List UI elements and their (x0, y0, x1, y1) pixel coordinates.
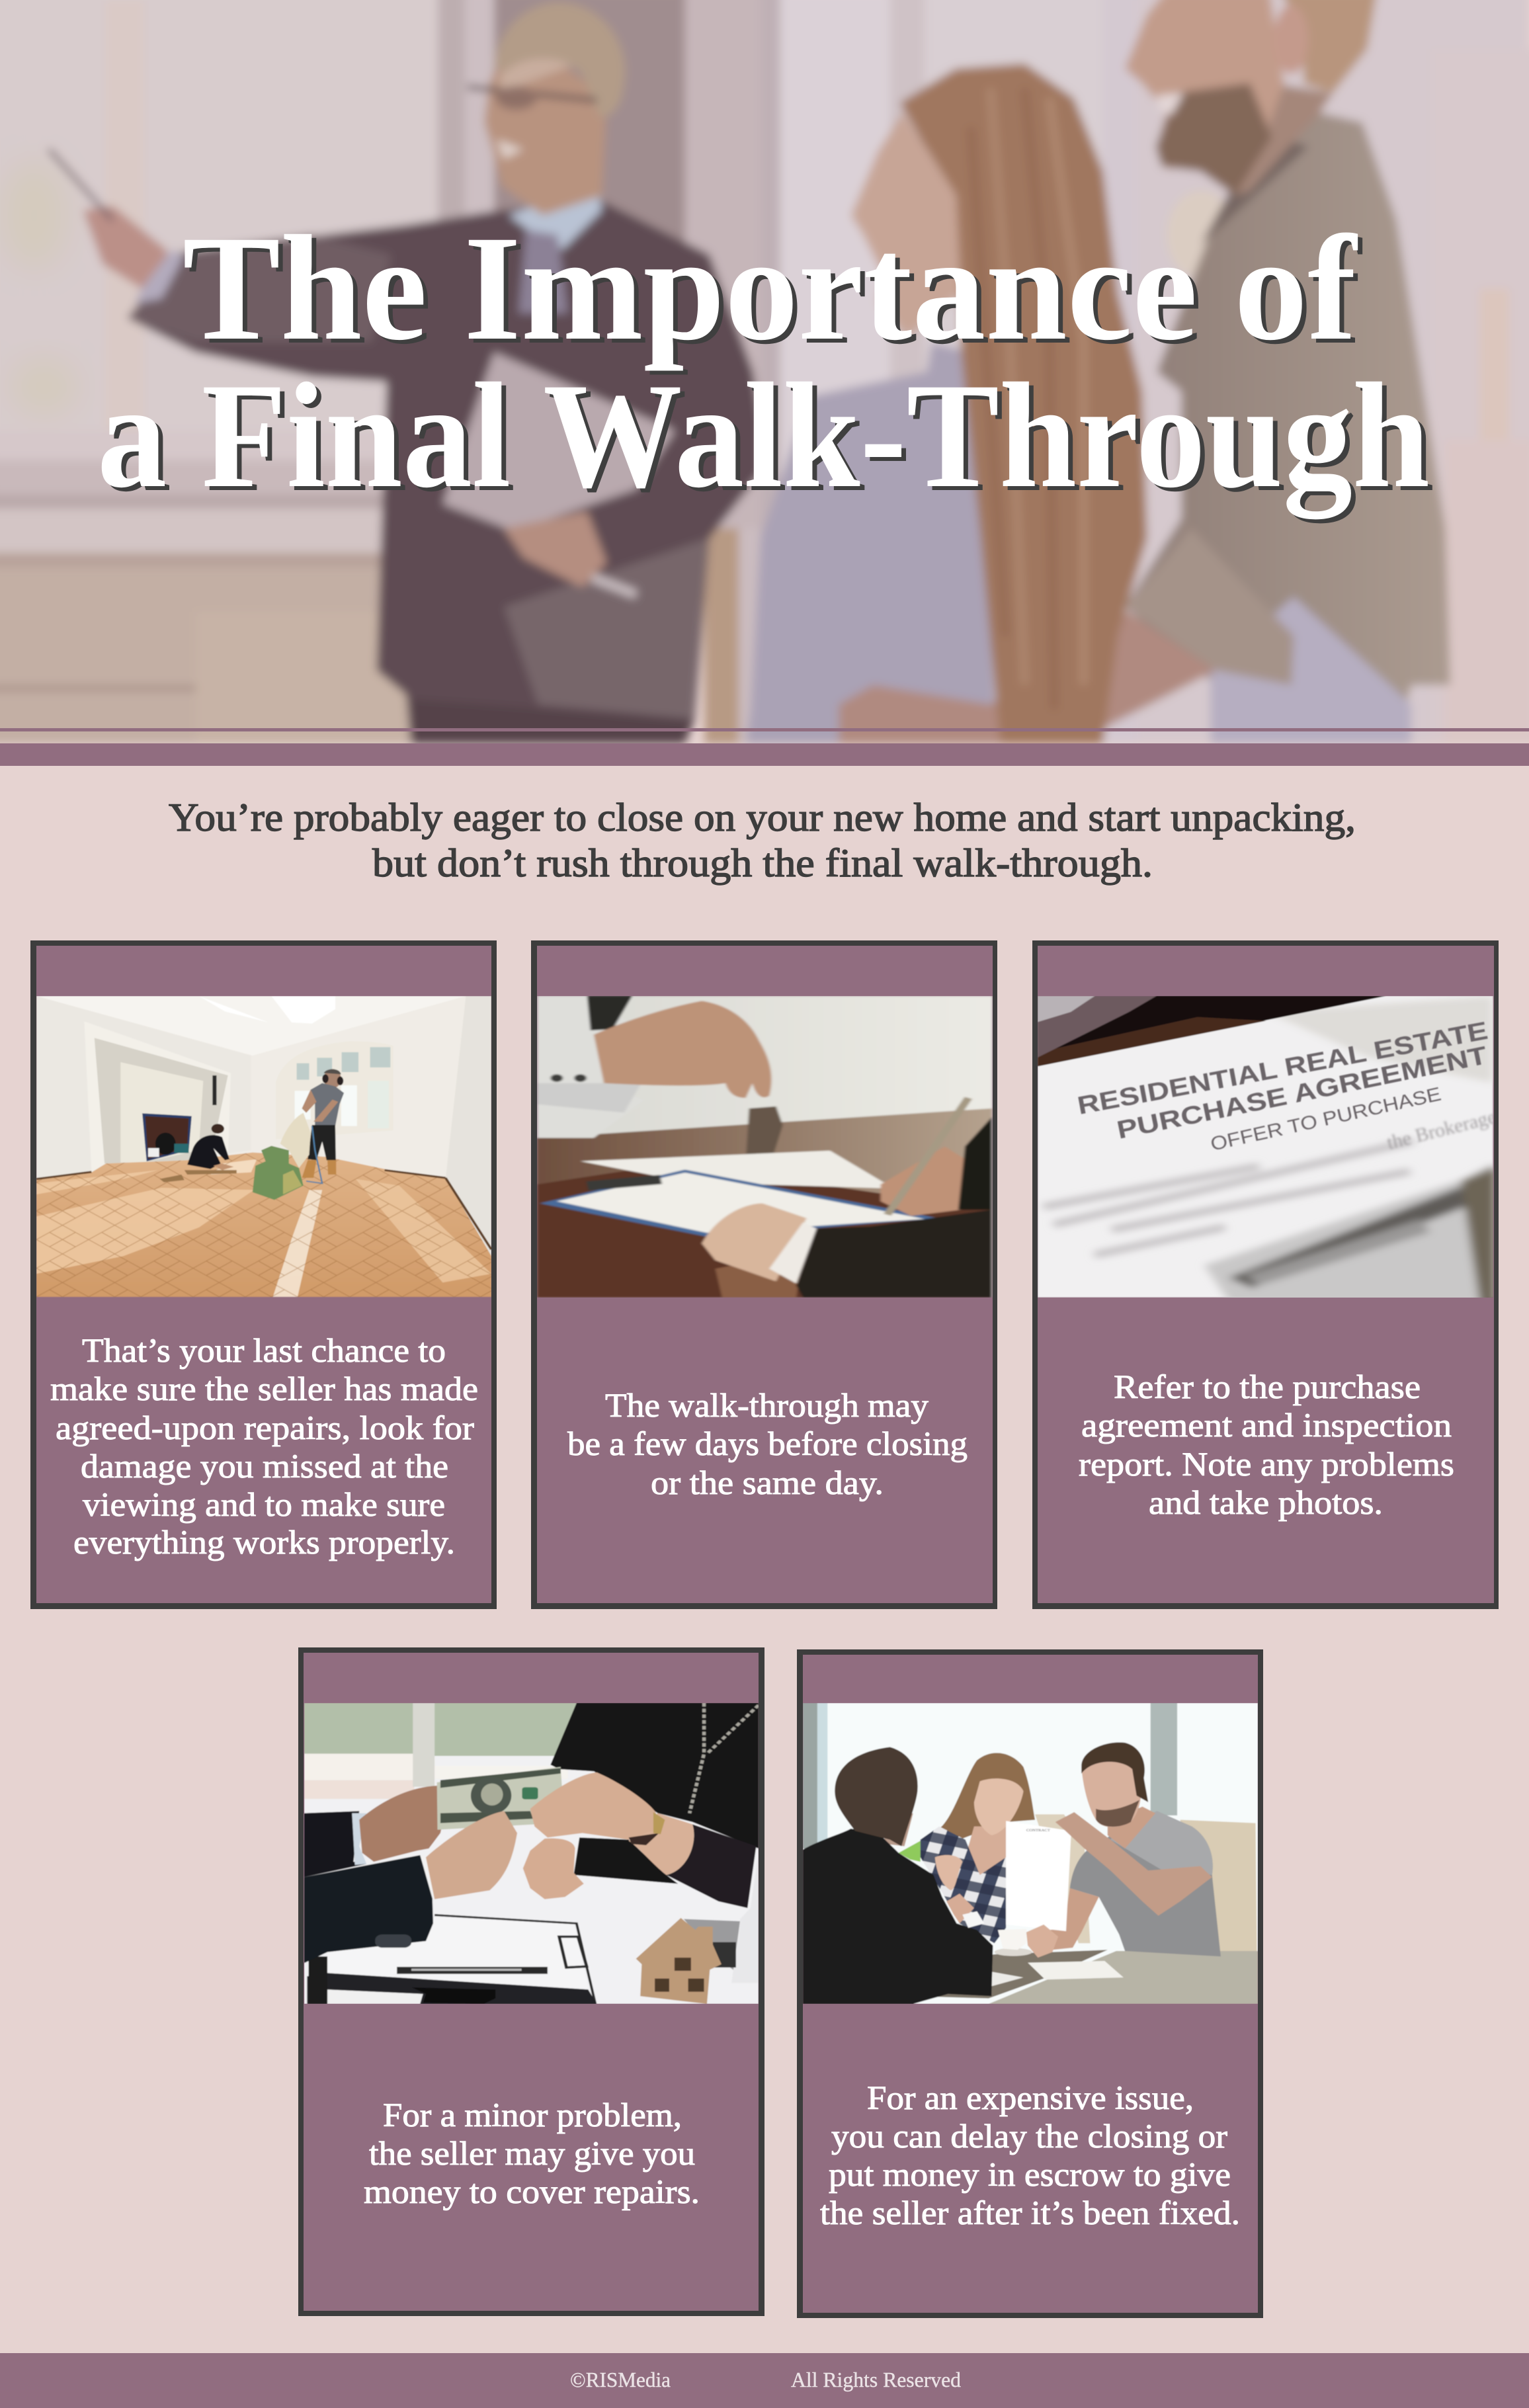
photo: couple reviewing contract with agent: CONTRACT (1026, 1829, 1050, 1833)
footer bar (0, 2353, 1529, 2408)
agent suit (127, 200, 767, 743)
arm and hand behind hair (839, 612, 1216, 743)
intro text (169, 796, 1356, 885)
document lettering in photo (1075, 1017, 1499, 1155)
man head (1235, 83, 1333, 196)
woman (939, 1753, 1035, 1840)
photo: couple reviewing contract with agent (803, 1703, 1258, 2004)
table (989, 1951, 1258, 2004)
intro text: You’re probably eager to close on your new home and start unpacking, (169, 796, 1356, 839)
card 1 text: make sure the seller has made (50, 1371, 478, 1408)
card 4 text: For a minor problem, (383, 2097, 682, 2134)
card 4 text: money to cover repairs. (364, 2174, 700, 2211)
title: The Importance of (183, 205, 1358, 372)
man with sander (323, 1069, 341, 1089)
document lettering in photo: PURCHASE AGREEMENT (1114, 1042, 1489, 1145)
panel: card 1 (30, 940, 497, 1609)
card 3 text: Refer to the purchase (1114, 1369, 1421, 1406)
document lettering in photo: RESIDENTIAL REAL ESTATE (1075, 1017, 1490, 1120)
card 4 text: the seller may give you (369, 2136, 695, 2173)
agent head (484, 46, 606, 216)
rights text: All Rights Reserved (791, 2368, 961, 2391)
man shirt (1125, 112, 1450, 743)
green chair (899, 1841, 921, 1862)
left half of photo: agent (0, 0, 778, 743)
tablet and lower hand (443, 353, 675, 531)
card 2 text (567, 1388, 968, 1502)
laptop (684, 1919, 740, 1972)
card 1 text: everything works properly. (73, 1524, 455, 1561)
photo: purchase agreement document (1038, 996, 1499, 1306)
panel: card 4 (298, 1647, 764, 2316)
card 5 text: put money in escrow to give (829, 2157, 1231, 2194)
agent hand, shirt, tie (83, 206, 169, 288)
woman in black (550, 1703, 759, 1848)
card 4 text (364, 2097, 700, 2211)
cup (995, 1948, 1032, 1956)
arm holding page (1055, 1812, 1212, 1916)
kneeling worker (212, 1124, 224, 1134)
banknotes (437, 1767, 563, 1830)
panel: card 3 (1032, 940, 1499, 1609)
man in grey tee (1070, 1811, 1221, 1956)
wooden house (636, 1918, 722, 2004)
card 3 text: agreement and inspection (1081, 1407, 1452, 1444)
card 5 text: you can delay the closing or (831, 2118, 1227, 2155)
agent from behind (946, 1893, 974, 1923)
hair (900, 63, 1147, 743)
panel: card 2 (531, 940, 997, 1609)
right half of photo: couple (746, 0, 1529, 743)
card 1 text: viewing and to make sure (83, 1487, 445, 1524)
document lettering in photo: OFFER TO PURCHASE (1209, 1084, 1443, 1155)
copyright text: ©RISMedia (570, 2368, 671, 2391)
card 3 text: and take photos. (1149, 1485, 1383, 1522)
card 1 text (50, 1333, 478, 1561)
chairs (1035, 1814, 1090, 1943)
title (97, 205, 1430, 520)
photo: floor refinishing (36, 996, 491, 1297)
title: a Final Walk-Through (97, 353, 1430, 520)
thin rule over hero (0, 728, 1529, 731)
card 2 text: be a few days before closing (567, 1426, 968, 1463)
woman face (851, 112, 961, 337)
hero bottom band (0, 743, 1529, 766)
intro text: but don’t rush through the final walk-through. (372, 841, 1153, 885)
clipboard (327, 1917, 588, 1989)
card 5 text: For an expensive issue, (867, 2080, 1194, 2117)
card 1 text: That’s your last chance to (82, 1333, 446, 1370)
photo: keys and contract (537, 996, 993, 1298)
bay window (276, 1041, 393, 1140)
card 1 text: damage you missed at the (81, 1448, 448, 1485)
card 5 text: the seller after it’s been fixed. (820, 2195, 1240, 2232)
floor (36, 1153, 491, 1297)
card 5 text (820, 2080, 1240, 2232)
fireplace (142, 1113, 192, 1161)
man's sleeves and hands (304, 1811, 366, 1877)
card 3 text (1079, 1369, 1454, 1522)
card 1 text: agreed-upon repairs, look for (56, 1410, 474, 1447)
photo: money handover (304, 1703, 759, 2004)
document lettering in photo: the Brokerage (1385, 1106, 1499, 1154)
card 3 text: report. Note any problems (1079, 1446, 1454, 1483)
contract page (1006, 1821, 1071, 1931)
woman shirt (746, 343, 995, 743)
card 2 text: or the same day. (651, 1465, 884, 1502)
woman's hands (629, 1813, 694, 1875)
hero photo: agent showing home to couple (0, 0, 1529, 743)
card 2 text: The walk-through may (605, 1388, 929, 1425)
alcove and mantel (84, 1021, 231, 1173)
man's head (1081, 1761, 1141, 1827)
panel: card 5 (797, 1649, 1263, 2318)
